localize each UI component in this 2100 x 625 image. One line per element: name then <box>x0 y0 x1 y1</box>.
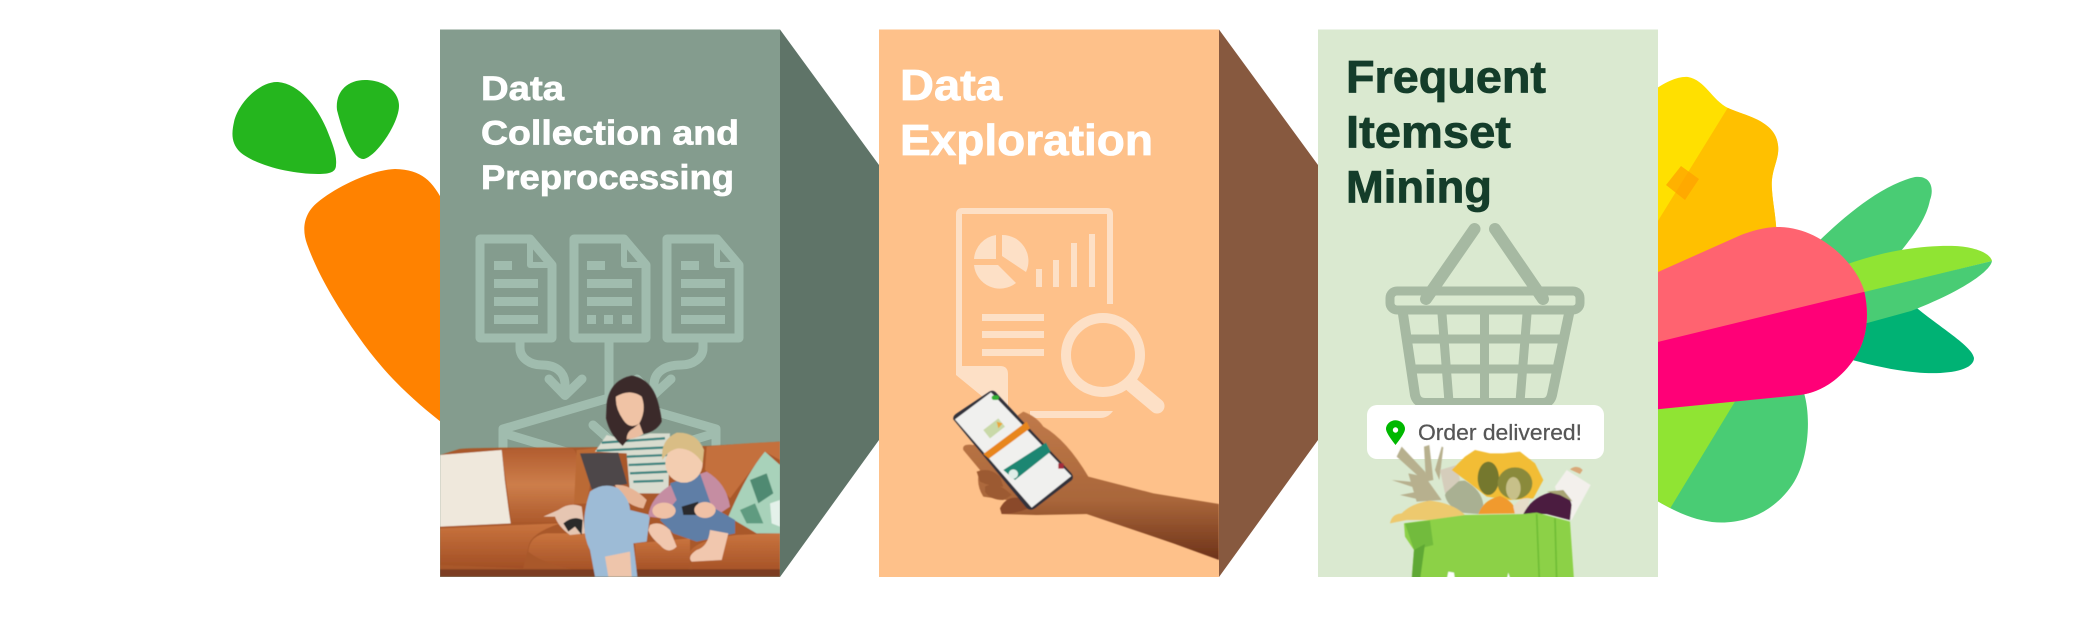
heading: Itemset <box>1346 106 1511 158</box>
report outline <box>959 211 1110 372</box>
panel background <box>440 30 780 577</box>
pineapple leaves <box>1392 445 1443 502</box>
sofa <box>440 442 780 577</box>
open box <box>503 398 716 456</box>
basket body <box>1403 314 1569 403</box>
middle leaf <box>1845 246 1992 325</box>
pin icon <box>1386 420 1405 445</box>
app illustration <box>983 418 1005 438</box>
photo: hand holding phone <box>953 391 1219 560</box>
phone <box>953 391 1073 510</box>
heading <box>481 70 739 197</box>
fingers <box>977 470 1028 514</box>
status text: Order delivered! <box>1418 420 1582 445</box>
bananas <box>1390 501 1465 523</box>
artichoke <box>1445 481 1483 514</box>
arrow connector 2 <box>1219 30 1318 577</box>
status card <box>1367 405 1604 459</box>
bottom right leaf <box>1845 298 1974 373</box>
arm <box>963 412 1219 560</box>
logo: colorful carrot right half <box>1640 77 1992 523</box>
top right leaf <box>1815 177 1932 270</box>
document 3 <box>667 239 739 338</box>
carrot left leaf <box>232 82 336 174</box>
carrot right leaf <box>337 80 399 159</box>
plush toy <box>543 505 585 535</box>
heading: Collection and <box>481 114 739 152</box>
sunflowers <box>1452 450 1543 500</box>
photo: mother and child on sofa <box>440 376 780 577</box>
document 2 <box>574 239 646 338</box>
carrot body <box>304 169 445 425</box>
white pillow <box>440 450 511 527</box>
text lines <box>982 314 1044 356</box>
report fold <box>956 366 1008 406</box>
basket handles <box>1426 229 1543 299</box>
heading: Data <box>900 61 1003 110</box>
bottom green leaf <box>1658 394 1808 522</box>
icon: shopping basket <box>1390 229 1580 403</box>
basket rim <box>1390 291 1580 310</box>
heading <box>1346 52 1546 212</box>
heading <box>902 70 1151 164</box>
panel background <box>1318 30 1658 577</box>
pie chart <box>974 235 1028 289</box>
patterned pillow <box>728 452 780 533</box>
panel: data collection and preprocessing <box>440 30 780 577</box>
panel: frequent itemset mining <box>1318 30 1658 580</box>
magnifier <box>1066 318 1157 406</box>
arrow connector 1 <box>780 30 879 577</box>
yellow top leaf <box>1658 76 1778 272</box>
paper towel <box>1555 470 1591 520</box>
pepper <box>1478 496 1516 514</box>
photo: grocery bag <box>1390 445 1591 580</box>
child <box>648 433 735 562</box>
red item <box>1058 463 1064 469</box>
eggplant <box>1523 492 1572 520</box>
orange banner <box>983 422 1030 459</box>
green badge <box>992 395 999 400</box>
carrot body pink <box>1640 227 1867 411</box>
logo: orange carrot left half <box>232 80 445 425</box>
basket grid <box>1407 314 1565 402</box>
heading: Preprocessing <box>481 159 734 197</box>
bar chart <box>1036 234 1095 287</box>
panel: data exploration <box>879 30 1219 577</box>
heading: Frequent <box>1346 52 1546 102</box>
heading: Data <box>481 70 565 108</box>
teal card <box>1003 443 1051 480</box>
panel background <box>879 30 1219 577</box>
icon: documents merging into box <box>480 239 739 456</box>
report bottom line <box>1030 411 1113 418</box>
green bag <box>1404 513 1574 580</box>
heading: Mining <box>1346 162 1492 212</box>
icon: report with magnifier <box>956 211 1157 418</box>
connector arrows <box>520 342 703 400</box>
document 1 <box>480 239 552 338</box>
heading: Exploration <box>900 116 1153 165</box>
woman <box>580 376 670 577</box>
